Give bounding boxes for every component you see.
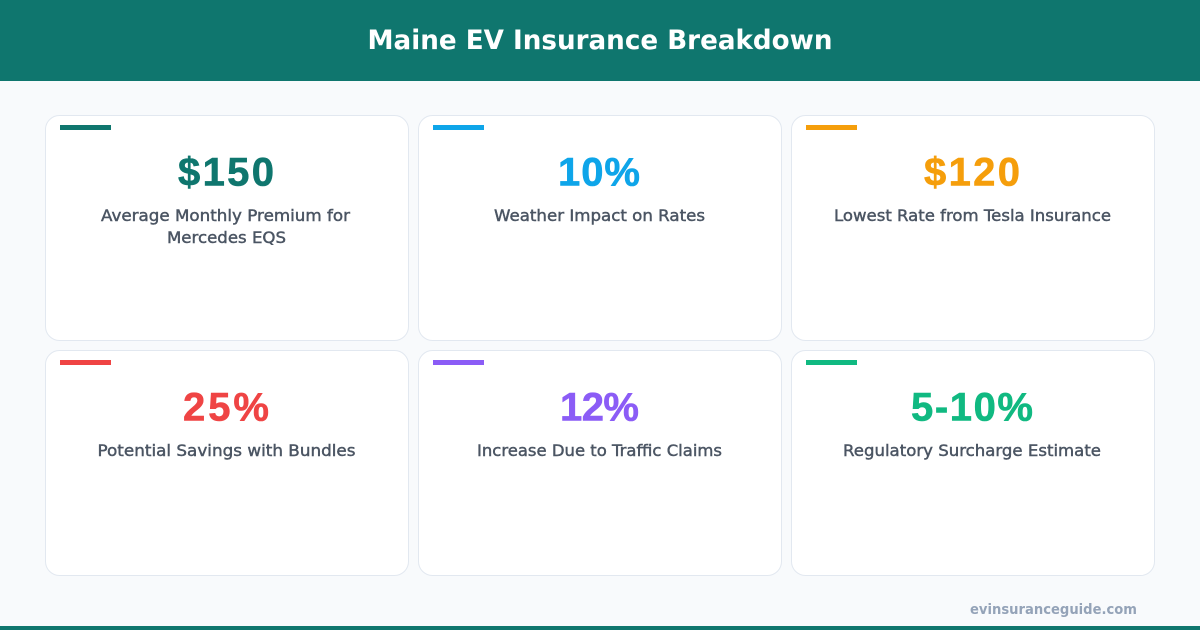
stat: 12%: 12% — [560, 386, 639, 430]
label: traffic claims: Increase Due to Traffic Claims — [477, 441, 722, 460]
label: weather impact: Weather Impact on Rates — [494, 206, 705, 225]
label: average monthly premium — [101, 206, 350, 247]
bottom bar — [0, 626, 1200, 630]
label: average monthly premium: Average Monthly Premium for — [101, 206, 350, 225]
stat: 10%: 10% — [558, 150, 640, 194]
stat: 25%: 25% — [183, 386, 269, 430]
header banner — [0, 0, 1200, 81]
label: average monthly premium: Mercedes EQS — [167, 228, 286, 247]
panel: traffic claims — [418, 350, 782, 576]
label: bundle savings: Potential Savings with Bundles — [98, 441, 356, 460]
label: regulatory surcharge: Regulatory Surcharge Estimate — [843, 441, 1101, 460]
panel: bundle savings — [46, 350, 408, 576]
stat: 5-10%: 5-10% — [911, 386, 1033, 430]
stat: $120: $120 — [924, 150, 1020, 194]
label: lowest rate: Lowest Rate from Tesla Insurance — [834, 206, 1111, 225]
panel: lowest rate — [792, 116, 1154, 340]
panel: regulatory surcharge — [792, 350, 1154, 576]
panel: average monthly premium — [46, 116, 408, 340]
footer source text: evinsuranceguide.com — [970, 602, 1137, 618]
panel: weather impact — [418, 116, 782, 340]
stat: $150: $150 — [178, 150, 274, 194]
title: Maine EV Insurance Breakdown — [368, 25, 832, 56]
